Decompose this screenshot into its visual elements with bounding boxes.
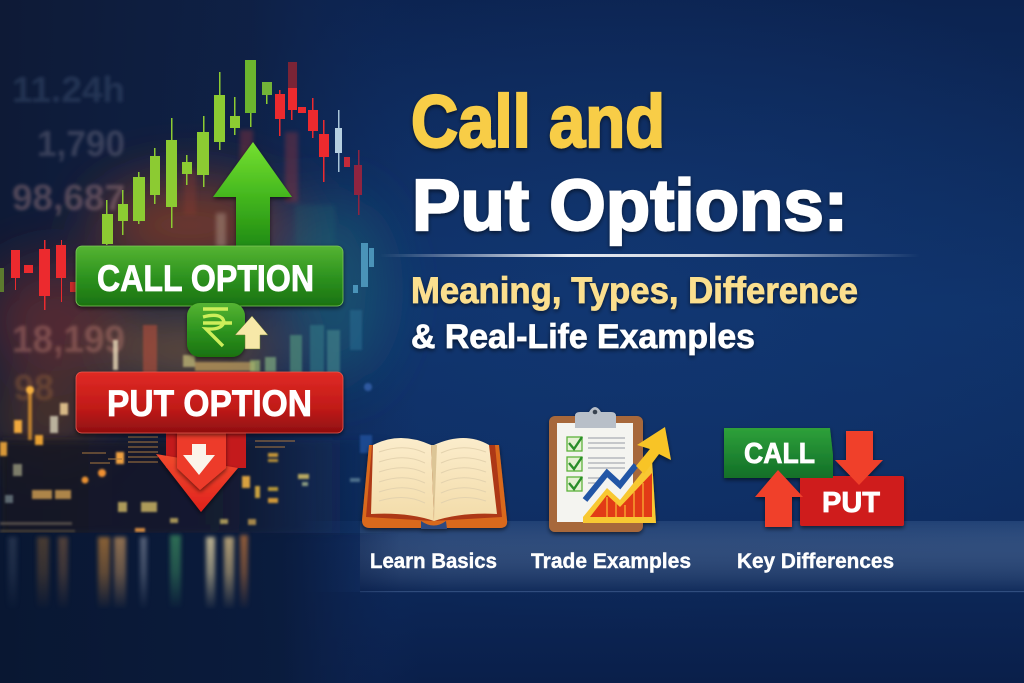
subtitle line 1: Meaning, Types, Difference	[411, 270, 858, 311]
blue trend line	[585, 465, 636, 500]
ghost price numbers: 11.24h	[12, 69, 125, 110]
fading candles right	[335, 110, 374, 293]
chart	[583, 460, 656, 523]
water reflections	[0, 533, 400, 683]
window grid	[82, 436, 295, 464]
down arrow	[835, 431, 883, 485]
city skyline and lights	[0, 310, 400, 535]
glow behind market scene	[0, 180, 385, 460]
title line 2: Put Options:	[412, 166, 848, 246]
small up arrow	[235, 316, 268, 349]
icon: red down arrow	[156, 428, 246, 512]
book pages left	[371, 438, 434, 521]
icon: clipboard with chart	[549, 407, 671, 532]
icon: call and put comparison: PUT	[822, 487, 880, 519]
icon: open book	[362, 438, 507, 529]
put box	[800, 476, 904, 526]
call option label: CALL OPTION	[97, 258, 314, 299]
checklist	[567, 437, 625, 491]
title line 1: Call and	[411, 80, 665, 163]
label: learn basics: Learn Basics	[370, 550, 497, 573]
call box	[724, 428, 833, 478]
icon: call and put comparison: CALL	[744, 438, 815, 470]
call option button	[76, 246, 343, 306]
label: key differences: Key Differences	[737, 550, 894, 573]
label: trade examples: Trade Examples	[531, 550, 691, 573]
subtitle	[411, 270, 858, 356]
book pages right	[434, 438, 497, 521]
skyline blocks	[0, 440, 400, 535]
put option button	[76, 372, 343, 433]
red candles	[0, 62, 362, 310]
ghost price numbers: 98	[14, 367, 54, 408]
ghost price numbers	[12, 69, 125, 408]
candlestick chart	[184, 130, 335, 247]
white small arrow	[183, 444, 215, 475]
lights	[0, 383, 372, 532]
rupee symbol	[203, 309, 232, 346]
icon: green up arrow	[213, 142, 292, 248]
green candles	[102, 60, 272, 245]
title	[411, 80, 848, 246]
ghost price numbers: 1,790	[37, 123, 125, 164]
bottom band	[300, 521, 1024, 592]
clip	[575, 407, 616, 428]
icon: rupee with up arrow	[187, 303, 268, 357]
put option label: PUT OPTION	[107, 383, 312, 424]
yellow arrow	[636, 427, 671, 474]
ghost price numbers: 98,687	[12, 177, 125, 218]
divider	[380, 254, 920, 257]
subtitle line 2: & Real-Life Examples	[411, 318, 755, 356]
ghost price numbers: 18,199	[12, 319, 125, 361]
up arrow	[755, 470, 803, 527]
icon: call and put comparison	[724, 428, 904, 527]
